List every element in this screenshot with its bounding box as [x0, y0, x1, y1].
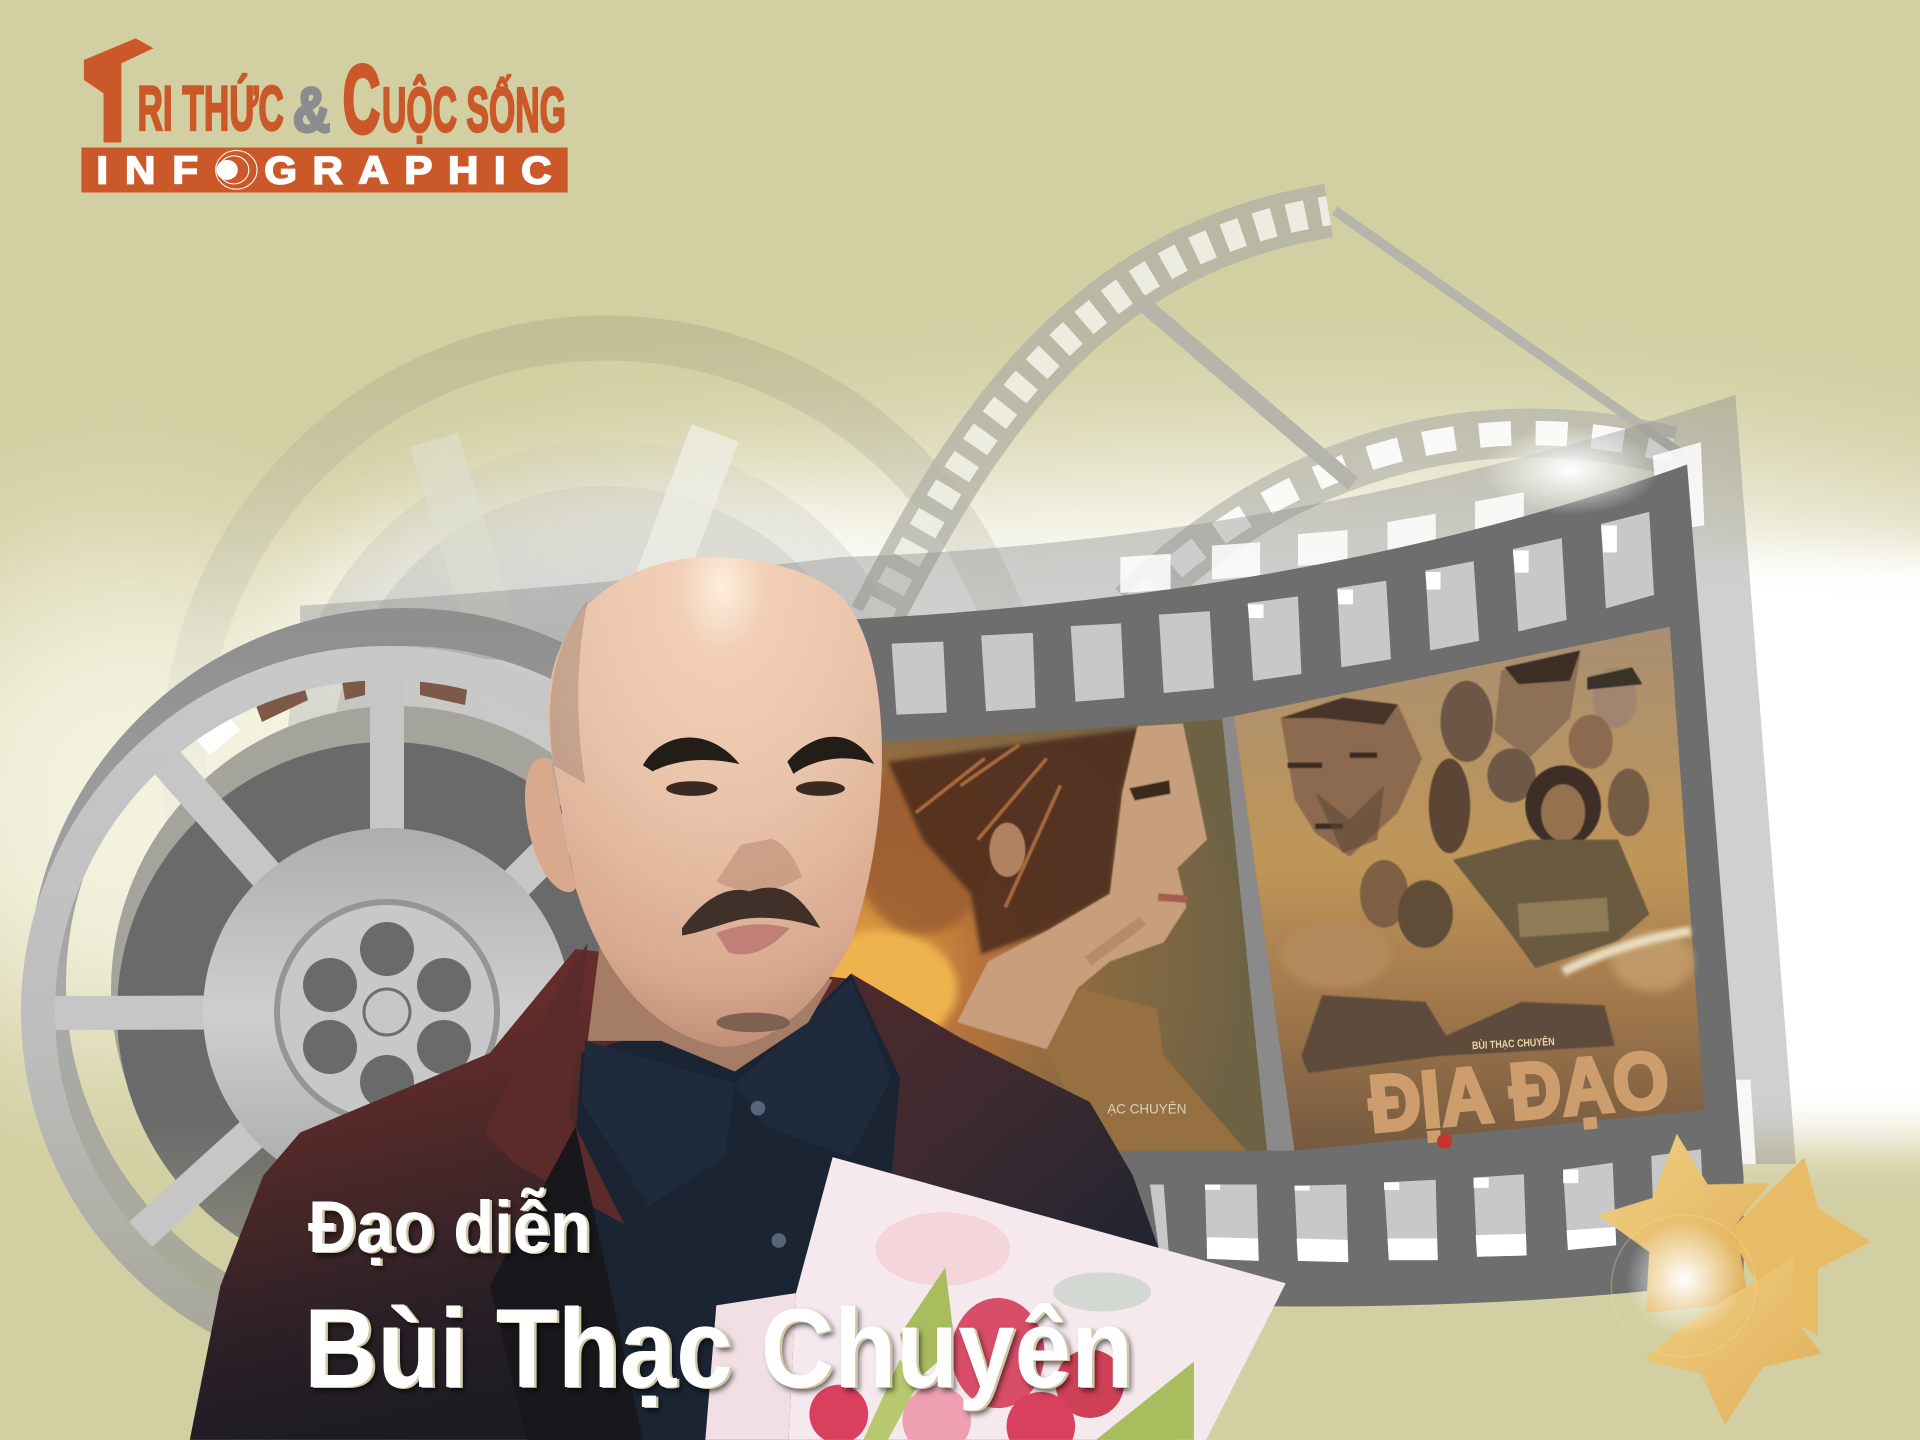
logo wordmark	[137, 46, 566, 154]
rear sheet	[705, 1293, 796, 1440]
film reel	[38, 627, 763, 1370]
logo infographic band: INF	[96, 148, 198, 192]
lens flare top right	[1480, 425, 1660, 515]
portrait: director	[190, 557, 1286, 1440]
front ring	[38, 663, 736, 1361]
jacket	[190, 949, 1176, 1440]
moustache	[682, 888, 820, 936]
ear	[989, 823, 1025, 877]
rear ring	[47, 627, 763, 1343]
central woman figure	[1525, 765, 1601, 846]
fire glow	[806, 931, 957, 1046]
poster: Địa Đạo	[1234, 627, 1704, 1151]
eyebrows	[643, 737, 874, 774]
curved strip rising to the top	[876, 211, 1329, 618]
curved strip on the right	[1133, 433, 1671, 606]
sprocket holes bottom	[1150, 1149, 1704, 1262]
poster credit: BÙI THẠC CHUYÊN	[1472, 1035, 1555, 1052]
logo infographic band	[81, 148, 568, 192]
logo wordmark: RI THỨC	[137, 73, 284, 143]
red dot	[1437, 1134, 1452, 1149]
sprocket holes top	[892, 512, 1654, 715]
neck	[588, 943, 833, 1071]
poster: woman in profile	[806, 719, 1267, 1151]
translucent rear film frame	[300, 395, 1796, 1164]
eyes	[666, 781, 845, 796]
lapel	[484, 943, 624, 1224]
dark disc	[117, 742, 657, 1282]
poster gap	[1222, 716, 1295, 1151]
logo wordmark: C	[343, 46, 380, 154]
hub plate	[277, 902, 497, 1122]
spokes	[55, 660, 640, 1370]
thin film edges	[1139, 211, 1684, 484]
nose	[716, 839, 802, 892]
logo	[81, 38, 568, 192]
tanks	[1301, 995, 1615, 1073]
faded film strips behind	[876, 211, 1684, 618]
logo wordmark: &	[293, 75, 330, 145]
title: Đạo diễn: Đạo diễn	[308, 1187, 591, 1268]
gold stars	[1598, 1134, 1871, 1424]
right jacket panel	[833, 973, 1161, 1255]
poster title: ĐỊA ĐẠO	[1365, 1035, 1672, 1149]
hairline stubble	[550, 600, 588, 784]
flowers	[809, 1212, 1194, 1440]
hair	[888, 728, 1140, 955]
title: Bùi Thạc Chuyên: Bùi Thạc Chuyên	[304, 1286, 1133, 1411]
main film strip	[806, 464, 1744, 1306]
face	[957, 723, 1207, 1049]
buttons	[751, 1101, 786, 1248]
sweater	[1047, 988, 1246, 1151]
poster glimpses through reel	[192, 664, 470, 755]
hub	[203, 828, 571, 1196]
logo infographic band: GRAPHIC	[264, 148, 552, 192]
inner band	[111, 706, 679, 1274]
black front panel	[490, 1127, 643, 1440]
paper	[789, 1157, 1286, 1440]
shirt collar	[582, 980, 891, 1206]
dust clouds	[1611, 931, 1694, 992]
ear	[525, 758, 576, 892]
goatee	[716, 1013, 790, 1032]
upper cast faces	[1281, 698, 1422, 857]
shirt	[576, 973, 900, 1440]
side figures	[1608, 769, 1649, 836]
logo: UỘC SỐNG	[382, 75, 566, 145]
head	[548, 557, 882, 1047]
poster credit: ẠC CHUYÊN	[1107, 1102, 1186, 1116]
faded film reel behind	[184, 338, 1028, 1182]
logo T mark	[84, 38, 154, 143]
mouth	[716, 924, 790, 954]
